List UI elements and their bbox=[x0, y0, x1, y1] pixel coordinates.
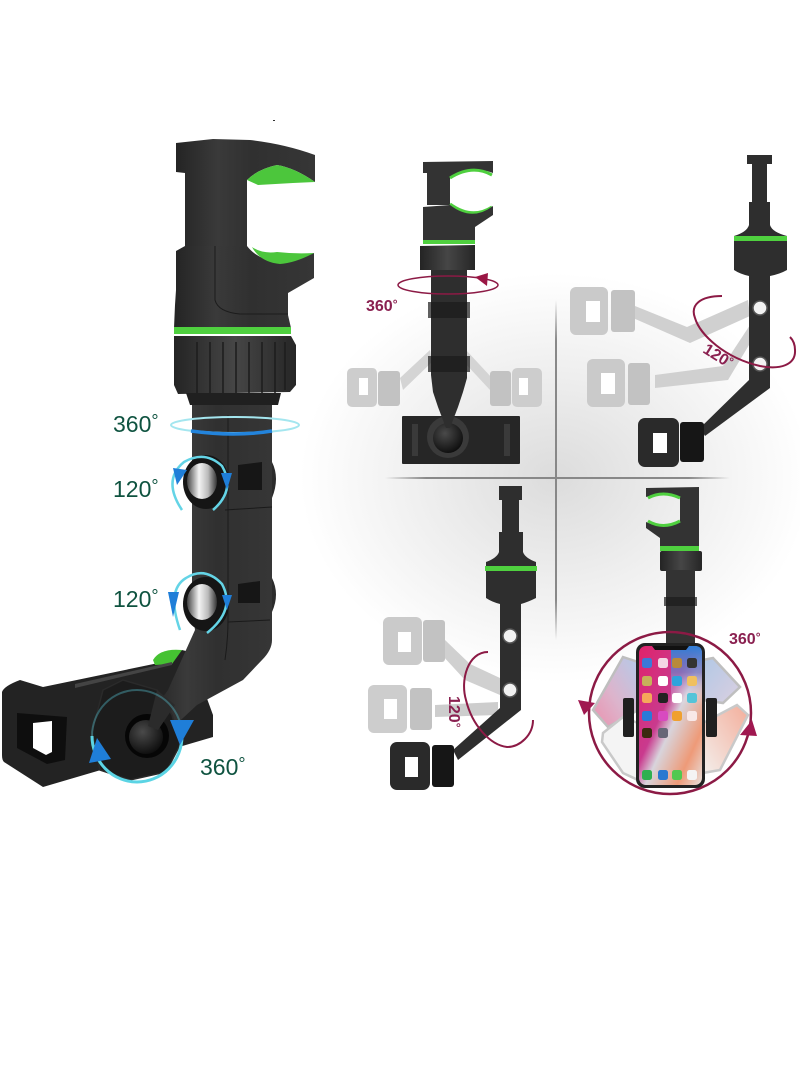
blue rotation arc: upper 120 bbox=[172, 457, 232, 510]
right arrowhead bbox=[740, 720, 757, 736]
nut bbox=[660, 551, 702, 571]
panel: side view up bbox=[570, 155, 795, 467]
clamp bbox=[423, 161, 493, 205]
arm clips bbox=[428, 302, 470, 372]
label 120: ° bbox=[449, 723, 463, 728]
arm clips bbox=[664, 597, 697, 606]
background glow bbox=[290, 265, 800, 690]
arrowhead bbox=[475, 273, 488, 286]
ghost phone: lower right bbox=[703, 705, 748, 773]
ghost phone: upper left bbox=[593, 657, 638, 727]
green ring bbox=[660, 546, 699, 551]
clamp body bbox=[646, 522, 699, 546]
stem bbox=[700, 155, 787, 436]
pivots bbox=[753, 301, 767, 371]
green ring bbox=[423, 240, 475, 244]
lower clamp body bbox=[174, 246, 314, 328]
pivots bbox=[503, 629, 517, 697]
label: 120 upper: 120 bbox=[113, 476, 151, 502]
side clips bbox=[623, 698, 717, 737]
clamp body bbox=[423, 205, 493, 240]
stray dot bbox=[273, 120, 275, 121]
ball joint bbox=[125, 690, 175, 758]
nut bbox=[420, 245, 475, 270]
ghost positions bbox=[570, 287, 752, 407]
divider lines bbox=[385, 300, 730, 640]
lower arm bbox=[150, 405, 272, 730]
ghost phone: lower left bbox=[602, 717, 638, 780]
top clamp bbox=[176, 139, 315, 250]
label: 360 bottom: 360 bbox=[200, 754, 238, 780]
left arrowhead bbox=[578, 700, 595, 715]
label 120: 120 bbox=[445, 696, 462, 723]
label: 360 bottom: ° bbox=[238, 754, 246, 774]
green ring bbox=[174, 327, 291, 334]
green ring bbox=[485, 566, 537, 571]
head bbox=[390, 742, 454, 790]
rotation arc bbox=[694, 296, 795, 367]
upper arm seam and clips bbox=[225, 415, 276, 660]
label 120: ° bbox=[725, 354, 736, 369]
top clamp green pad bbox=[247, 165, 315, 185]
label: 120 upper: ° bbox=[151, 476, 159, 496]
phone bbox=[636, 643, 705, 788]
bracket plate bbox=[2, 650, 213, 787]
blue rotation ring: top 360 bbox=[171, 417, 299, 434]
label 360: 360 bbox=[366, 298, 393, 315]
phone plate bbox=[402, 416, 520, 464]
blue rotation ring: ball 360 bbox=[89, 690, 194, 782]
ghost positions bbox=[347, 350, 542, 407]
panel: phone rotation bbox=[578, 487, 761, 794]
ghost phone: upper right bbox=[703, 658, 740, 703]
label 360: 360 bbox=[729, 631, 756, 648]
rotation arc bbox=[464, 652, 533, 747]
main holder bbox=[2, 139, 315, 787]
ball bbox=[427, 416, 469, 458]
label 360: ° bbox=[393, 297, 398, 311]
label: 360 top: 360 bbox=[113, 411, 151, 437]
label 120: 120 bbox=[700, 341, 732, 370]
lower pivot bbox=[183, 577, 229, 631]
head bbox=[638, 418, 704, 467]
arm bbox=[431, 270, 467, 428]
panel: front view bbox=[347, 161, 542, 464]
label: 120 lower: ° bbox=[151, 586, 159, 606]
label: 360 top: ° bbox=[151, 411, 159, 431]
blue rotation arc: lower 120 bbox=[168, 573, 232, 633]
lower clamp green pad bbox=[252, 247, 314, 264]
rotation circle bbox=[589, 632, 751, 794]
clamp bbox=[646, 487, 699, 525]
rotation ring bbox=[398, 276, 498, 294]
app icons bbox=[642, 658, 697, 780]
ghost positions bbox=[368, 617, 500, 733]
green pads bbox=[648, 494, 680, 526]
ghost phones bbox=[593, 657, 748, 780]
arm bbox=[666, 570, 695, 644]
knurled nut bbox=[174, 336, 296, 395]
label: 120 lower: 120 bbox=[113, 586, 151, 612]
head nut bbox=[92, 680, 180, 780]
clamp inner shadow bbox=[215, 246, 288, 314]
clamp green pads bbox=[450, 170, 492, 213]
panel: side view down bbox=[368, 486, 537, 790]
neck bbox=[186, 393, 281, 405]
stem bbox=[453, 486, 536, 760]
label 360: ° bbox=[756, 630, 761, 644]
upper pivot bbox=[183, 455, 229, 509]
green ring bbox=[734, 236, 787, 241]
